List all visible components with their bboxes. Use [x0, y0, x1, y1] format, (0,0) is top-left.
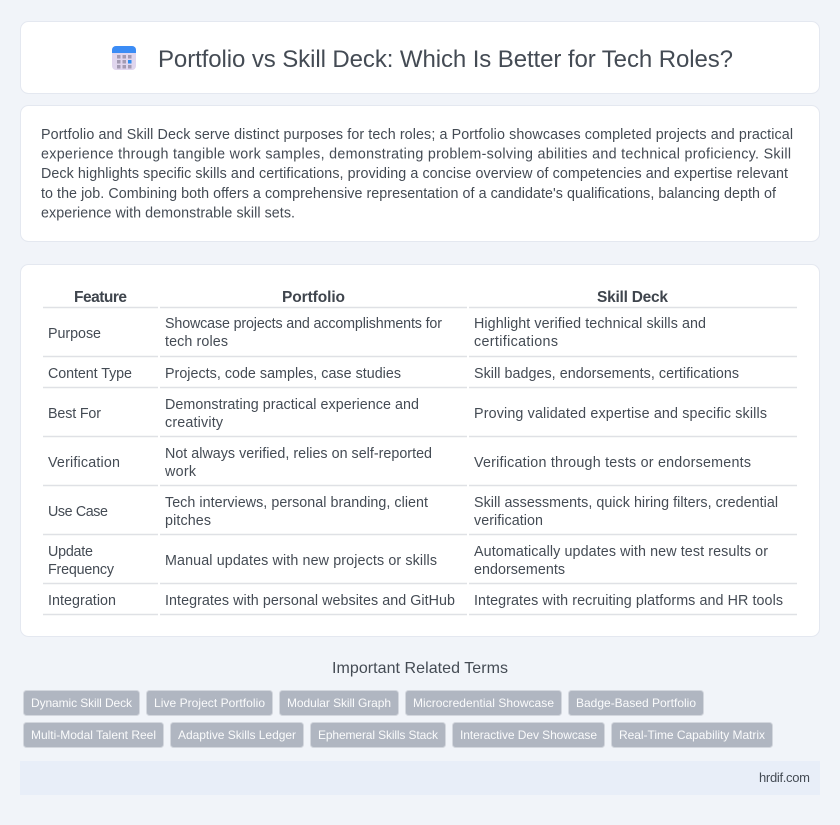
row: update frequency — [48, 544, 768, 578]
panel: intro text: to the job. Combining both offers a comprehensive representation of a candidate's qualifications, balancing depth of — [41, 186, 776, 202]
table header: Skill Deck — [597, 289, 668, 306]
tag: Dynamic Skill Deck — [31, 696, 133, 710]
row: update frequency: endorsements — [474, 562, 565, 578]
row: use case: Skill assessments, quick hiring filters, credential — [474, 495, 778, 511]
tag: Ephemeral Skills Stack — [318, 728, 439, 742]
table header — [74, 289, 668, 306]
panel: intro text: Deck highlights specific skills and certifications, providing a concise overview of competencies and expertise relevant — [41, 166, 788, 182]
row: integration: Integration — [48, 593, 116, 609]
row: use case: verification — [474, 513, 543, 529]
tag: Badge-Based Portfolio — [576, 696, 696, 710]
row: use case: pitches — [165, 513, 211, 529]
row: best for: Demonstrating practical experience and — [165, 397, 419, 413]
row: purpose: Purpose — [48, 326, 101, 342]
row: purpose: Showcase projects and accomplishments for — [165, 316, 442, 332]
row: integration — [48, 593, 783, 609]
icon: calendar grid — [112, 46, 136, 70]
row: update frequency: Automatically updates with new test results or — [474, 544, 768, 560]
panel: intro text: experience with demonstrable skill sets. — [41, 205, 295, 221]
tag — [24, 690, 140, 716]
panel: comparison table — [20, 264, 820, 636]
heading: related terms: Important Related Terms — [332, 660, 508, 677]
tag — [568, 690, 704, 716]
tag — [280, 690, 398, 716]
related term tags — [24, 690, 772, 748]
header panel — [20, 22, 820, 94]
row: best for: creativity — [165, 415, 224, 431]
table header: Portfolio — [282, 289, 345, 306]
row: verification: Not always verified, relies on self-reported — [165, 446, 432, 462]
row: best for: Best For — [48, 406, 101, 422]
row: update frequency: Frequency — [48, 562, 115, 578]
row: update frequency: Manual updates with new projects or skills — [165, 553, 437, 569]
tag: Modular Skill Graph — [287, 696, 391, 710]
row: use case — [48, 495, 778, 529]
tag: Multi-Modal Talent Reel — [31, 728, 156, 742]
tag: Live Project Portfolio — [154, 696, 265, 710]
tag — [146, 690, 272, 716]
row: verification: work — [164, 464, 197, 480]
row: content type — [48, 366, 739, 382]
row: content type: Skill badges, endorsements, certifications — [474, 366, 739, 382]
tag — [452, 722, 604, 748]
row: update frequency: Update — [48, 544, 93, 560]
row: integration: Integrates with personal websites and GitHub — [165, 593, 455, 609]
row: use case: Tech interviews, personal branding, client — [165, 495, 428, 511]
tag — [24, 722, 164, 748]
row: content type: Projects, code samples, case studies — [165, 366, 401, 382]
tag — [612, 722, 772, 748]
table header: Feature — [74, 289, 127, 306]
row: content type: Content Type — [48, 366, 132, 382]
row: use case: Use Case — [48, 504, 108, 520]
footer: hrdif.com — [759, 770, 810, 785]
tag: Adaptive Skills Ledger — [178, 728, 296, 742]
row: purpose: tech roles — [165, 334, 228, 350]
footer — [20, 761, 820, 795]
panel: intro text — [20, 106, 820, 242]
tag — [310, 722, 446, 748]
panel: intro text: Portfolio and Skill Deck serve distinct purposes for tech roles; a Portfolio showcases completed projects and practical — [41, 127, 793, 143]
title: Portfolio vs Skill Deck: Which Is Better for Tech Roles? — [158, 46, 733, 73]
tag: Real-Time Capability Matrix — [619, 728, 765, 742]
tag — [406, 690, 562, 716]
row: purpose — [48, 316, 706, 350]
row: integration: Integrates with recruiting platforms and HR tools — [474, 593, 783, 609]
tag: Interactive Dev Showcase — [460, 728, 597, 742]
row: verification: Verification through tests or endorsements — [474, 455, 751, 471]
row: purpose: certifications — [474, 334, 558, 350]
row: best for: Proving validated expertise and specific skills — [474, 406, 767, 422]
row: verification: Verification — [48, 455, 120, 471]
tag — [170, 722, 304, 748]
row: best for — [48, 397, 767, 431]
row: purpose: Highlight verified technical skills and — [474, 316, 706, 332]
row: verification — [48, 446, 751, 480]
panel: intro text: experience through tangible work samples, demonstrating problem-solving abilities and technical proficiency. Skill — [41, 147, 791, 163]
tag: Microcredential Showcase — [413, 696, 554, 710]
